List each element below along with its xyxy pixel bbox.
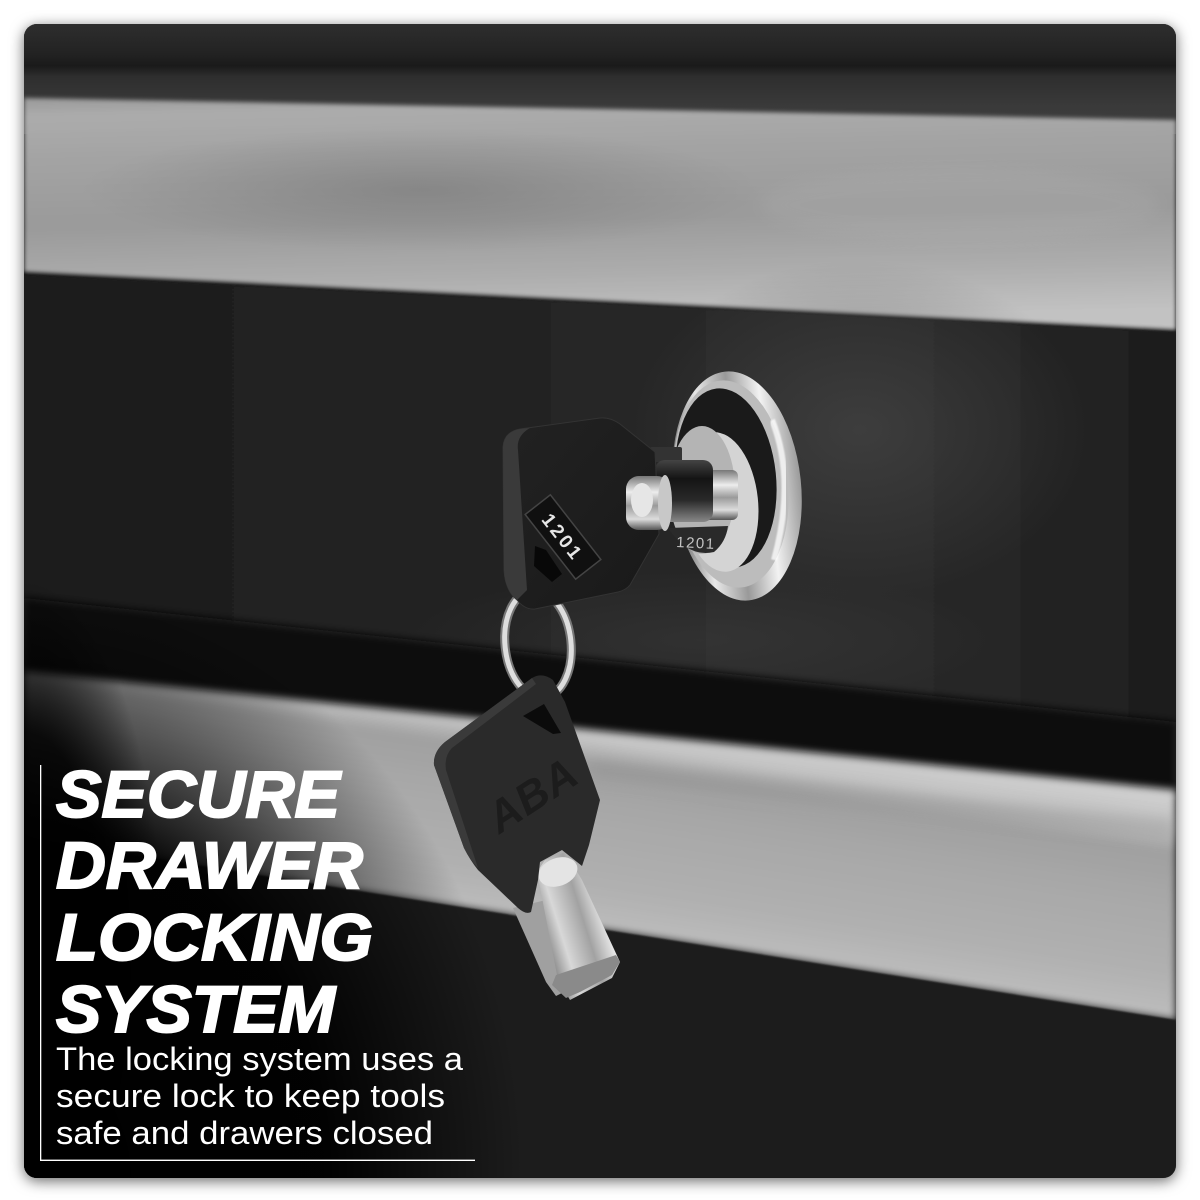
key head: [503, 418, 659, 609]
chrome lock cylinder: [674, 371, 802, 601]
key number tag: 1201: [537, 510, 587, 566]
headline: SECURE: [56, 757, 342, 831]
headline: [56, 757, 373, 1046]
embossed logo: ABA: [477, 748, 587, 843]
upper steel band: [24, 98, 1176, 330]
spare key head: [434, 675, 600, 913]
headline: SYSTEM: [56, 972, 337, 1046]
chrome lower inner band: [698, 432, 758, 572]
hanging spare key: [434, 675, 620, 1000]
key ring: [500, 596, 576, 694]
description: safe and drawers closed: [56, 1115, 433, 1151]
rim highlight: [772, 420, 785, 560]
lower black drawer: [24, 838, 1176, 1178]
top dark strip: [24, 24, 1176, 134]
spare key hole: [523, 704, 561, 734]
key tip: [626, 475, 672, 531]
chrome lock cylinder: 1201: [676, 534, 716, 553]
lower silver handle band: [24, 672, 1176, 1020]
key number tag: [525, 495, 601, 579]
key hole: [534, 546, 562, 582]
description: [56, 1041, 463, 1151]
inner barrel: [669, 426, 735, 554]
description: The locking system uses a: [56, 1041, 463, 1077]
headline: LOCKING: [56, 900, 373, 974]
outer chrome ring: [674, 371, 802, 601]
drawer gap shadow: [24, 598, 1176, 790]
headline: DRAWER: [56, 828, 363, 902]
bottom-left dark fade: [24, 626, 460, 1178]
spare key blade: [513, 852, 620, 1000]
text frame lines: [40, 765, 475, 1161]
key in lock: [503, 418, 713, 609]
description: secure lock to keep tools: [56, 1078, 445, 1114]
key blade shaft: [650, 447, 713, 522]
engraved code: [675, 526, 728, 553]
black drawer front: [24, 276, 1176, 722]
